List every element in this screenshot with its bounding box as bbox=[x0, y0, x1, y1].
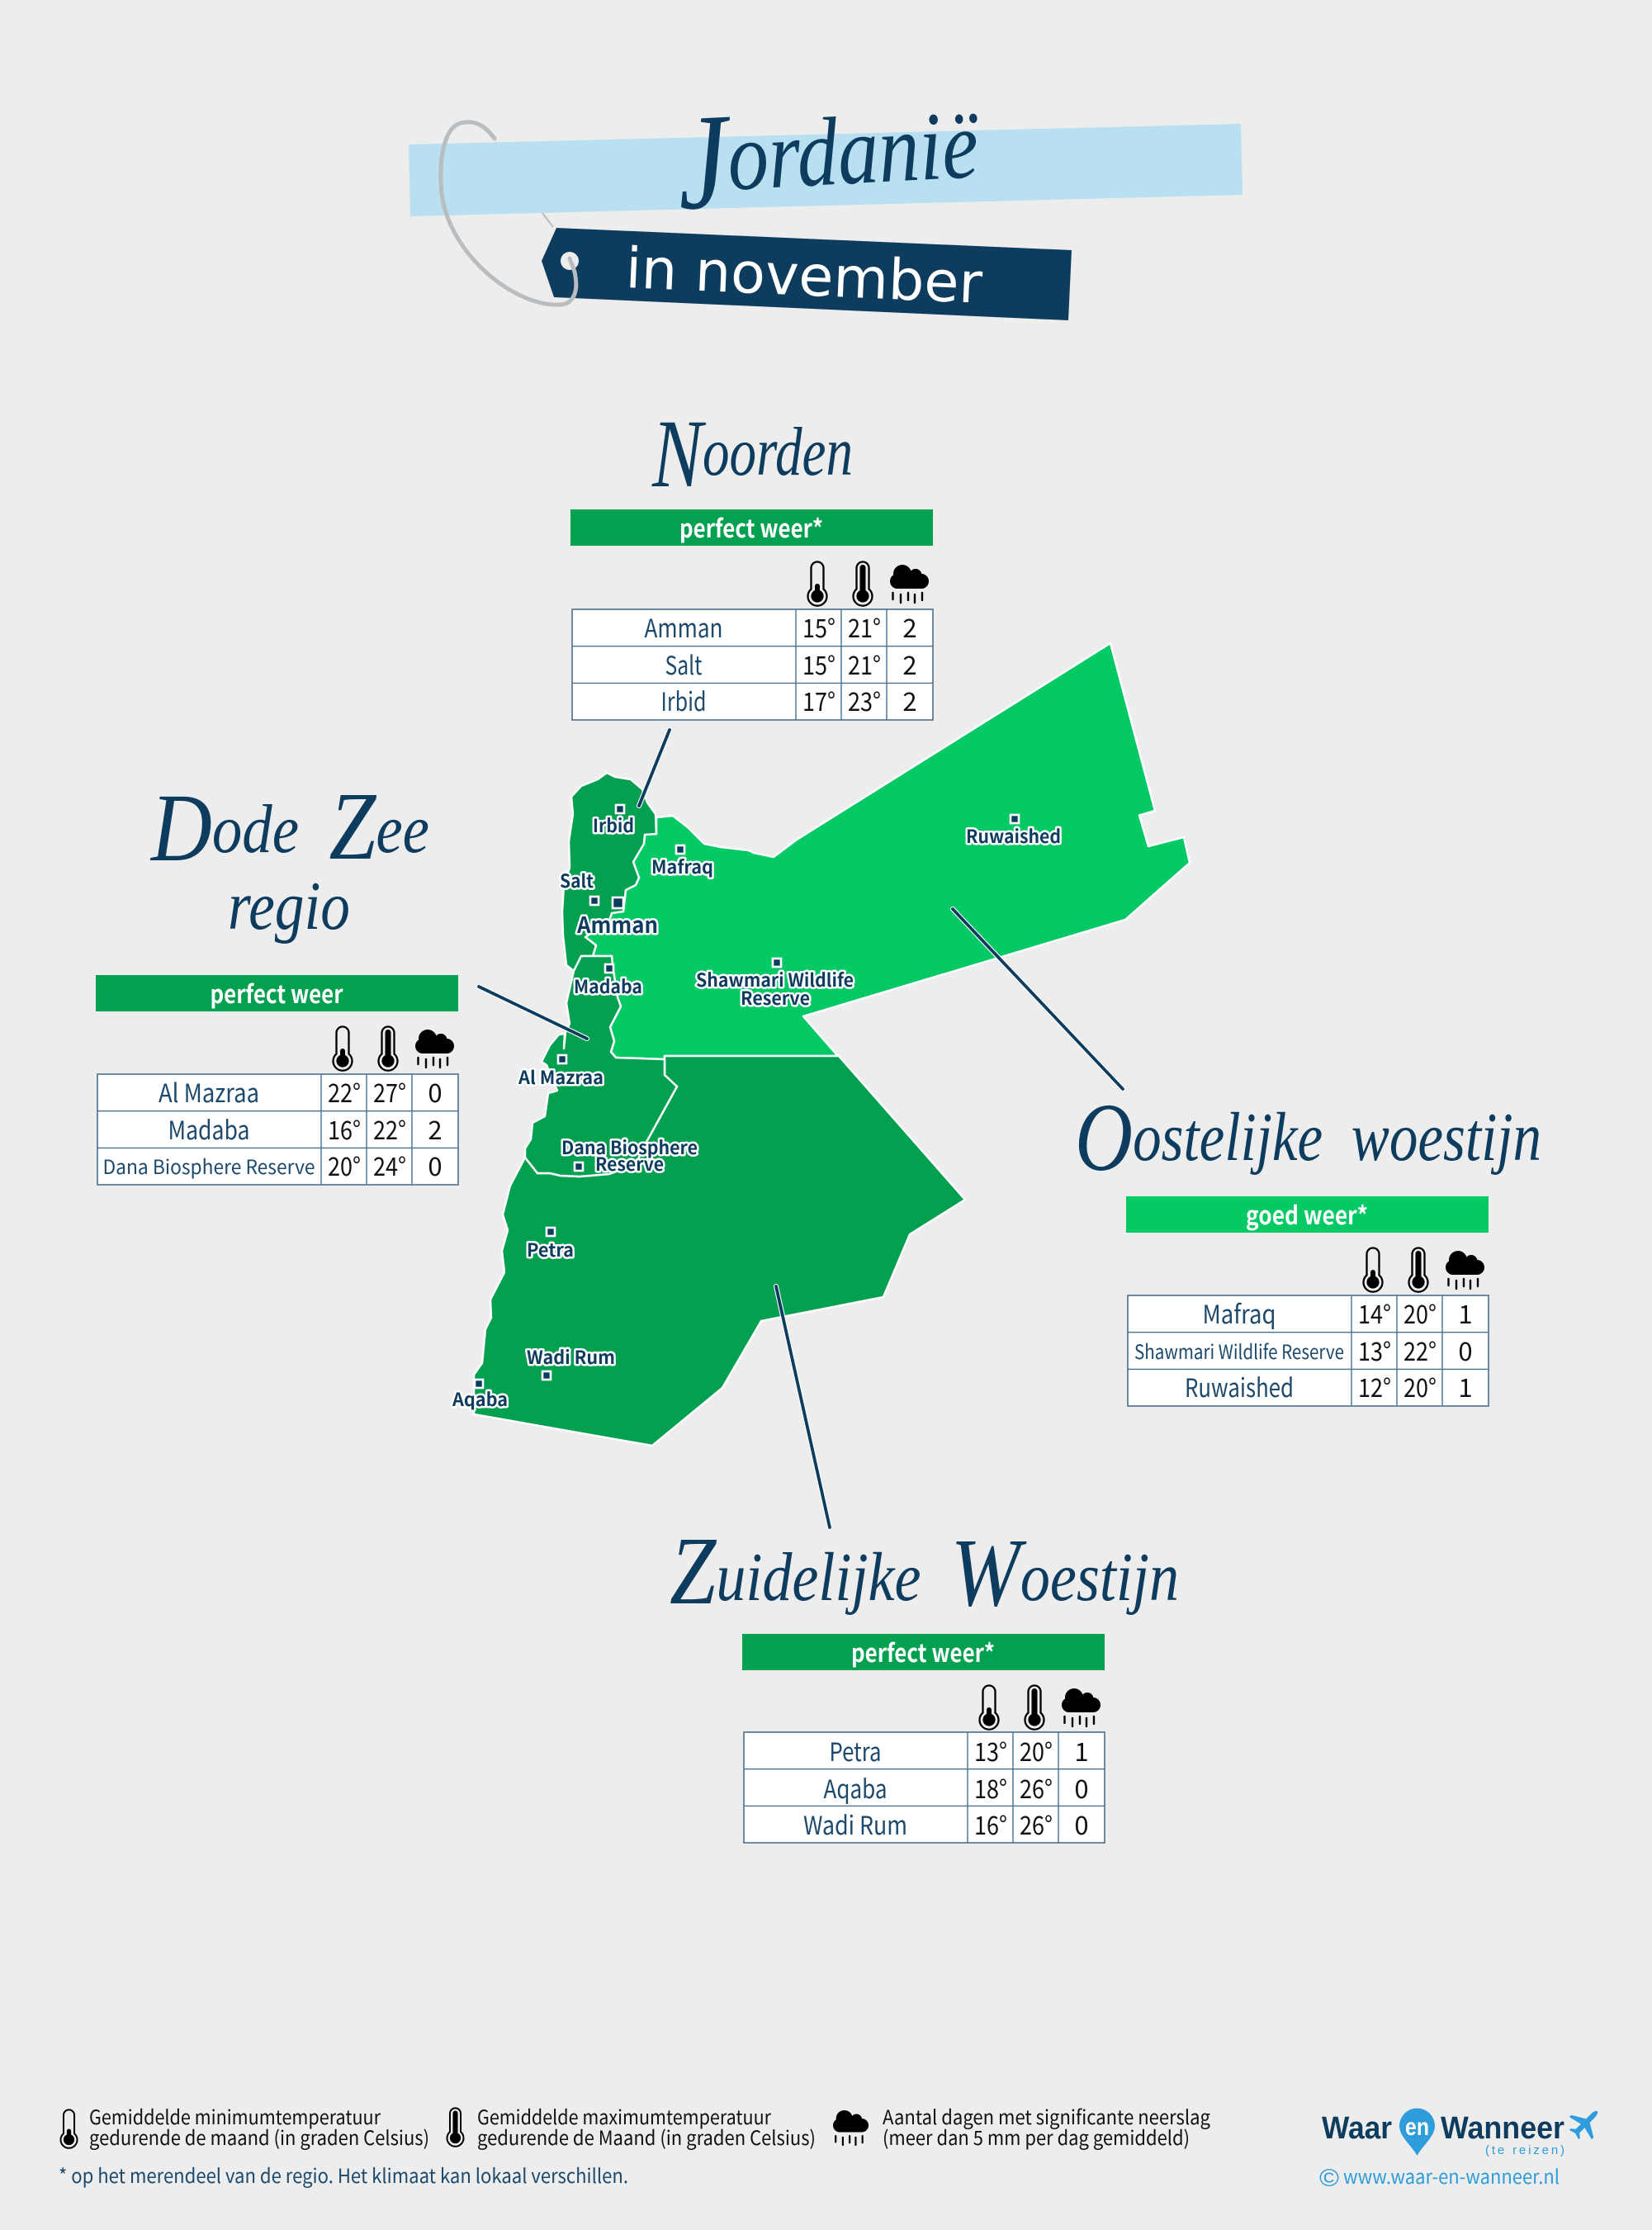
panel: Dode Zee regio bbox=[96, 974, 458, 1185]
title: Jordanië in november bbox=[409, 72, 1243, 320]
climate table: 22° bbox=[328, 1072, 361, 1110]
logo: Waar en Wanneer: (te reizen) bbox=[1485, 2143, 1564, 2157]
legend text: minimum temperature: Gemiddelde minimumtemperatuur bbox=[89, 2101, 381, 2130]
climate table: 2 bbox=[428, 1110, 443, 1147]
city labels bbox=[452, 812, 1061, 1412]
region: Zuidelijke Woestijn bbox=[474, 1056, 965, 1446]
city labels: Madaba bbox=[574, 973, 642, 999]
city labels: Dana Biosphere bbox=[561, 1134, 698, 1160]
status banner: perfect weer bbox=[210, 974, 343, 1011]
climate table: 27° bbox=[373, 1072, 406, 1110]
legend text: maximum temperature: Gemiddelde maximumtemperatuur bbox=[477, 2101, 772, 2130]
city labels: Ruwaished bbox=[966, 822, 1061, 849]
legend text: rain: (meer dan 5 mm per dag gemiddeld) bbox=[883, 2122, 1190, 2151]
logo: Waar en Wanneer bbox=[1322, 2100, 1608, 2157]
status banner: goed weer* bbox=[1246, 1195, 1368, 1232]
climate table bbox=[1128, 1294, 1489, 1406]
climate table: 2 bbox=[902, 608, 917, 645]
city labels: Shawmari Wildlife bbox=[696, 966, 854, 992]
climate table bbox=[97, 1072, 458, 1185]
climate table: 26° bbox=[1020, 1805, 1053, 1842]
climate table: 18° bbox=[974, 1768, 1007, 1806]
logo pin bbox=[1399, 2109, 1435, 2156]
climate table: 2 bbox=[902, 645, 917, 682]
icon: minimum temperature bbox=[1364, 1248, 1382, 1292]
city markers bbox=[475, 805, 1019, 1388]
climate table: Petra bbox=[829, 1731, 882, 1768]
climate table: 0 bbox=[1074, 1768, 1089, 1806]
climate table: 20° bbox=[1403, 1294, 1437, 1331]
climate table: 21° bbox=[848, 608, 881, 645]
city labels: Irbid bbox=[593, 812, 634, 838]
climate table: 1 bbox=[1458, 1367, 1473, 1404]
icon: legend rain bbox=[833, 2110, 869, 2145]
city labels: Mafraq bbox=[651, 853, 713, 879]
heading: Dode Zee regio: ee bbox=[376, 791, 429, 868]
price tag bbox=[542, 228, 1072, 320]
legend text: minimum temperature: gedurende de maand (in graden Celsius) bbox=[89, 2122, 429, 2151]
panel: Oostelijke woestijn bbox=[1126, 1195, 1489, 1406]
climate table: 2 bbox=[902, 681, 917, 718]
icon: maximum temperature bbox=[1408, 1248, 1428, 1292]
status banner: perfect weer* bbox=[851, 1633, 995, 1669]
website credit: www.waar-en-wanneer.nl bbox=[1343, 2161, 1560, 2190]
heading: Oostelijke woestijn: O bbox=[1075, 1083, 1133, 1191]
heading: Zuidelijke Woestijn: oestijn bbox=[1020, 1539, 1179, 1616]
climate table: 23° bbox=[848, 681, 881, 718]
icon: rain bbox=[890, 565, 929, 603]
region: Noorden bbox=[562, 773, 656, 971]
region: Dode Zee regio bbox=[525, 956, 677, 1177]
website credit: © bbox=[1319, 2165, 1339, 2192]
climate table: 13° bbox=[974, 1731, 1007, 1768]
climate table: Madaba bbox=[168, 1110, 249, 1147]
climate table: Salt bbox=[665, 645, 703, 682]
climate table: 1 bbox=[1074, 1731, 1089, 1768]
climate table: 26° bbox=[1020, 1768, 1053, 1806]
legend bbox=[60, 2101, 1210, 2151]
climate table: Amman bbox=[644, 608, 723, 645]
Jordanië: J bbox=[673, 85, 736, 239]
climate table: Irbid bbox=[660, 681, 707, 718]
climate table: 0 bbox=[428, 1072, 443, 1110]
climate table: Ruwaished bbox=[1185, 1367, 1294, 1404]
city labels: Amman bbox=[576, 907, 658, 940]
city labels: Al Mazraa bbox=[518, 1063, 604, 1090]
climate table: 1 bbox=[1458, 1294, 1473, 1331]
climate table: 20° bbox=[1403, 1367, 1437, 1404]
logo words: Waar bbox=[1322, 2111, 1392, 2146]
icon: maximum temperature bbox=[378, 1027, 398, 1071]
icon: rain bbox=[1062, 1688, 1101, 1726]
region: Oostelijke woestijn bbox=[585, 643, 1190, 1059]
city labels: Wadi Rum bbox=[527, 1343, 615, 1370]
climate table: Dana Biosphere Reserve bbox=[102, 1151, 315, 1180]
panel: Noorden bbox=[570, 509, 933, 720]
climate table: 22° bbox=[373, 1110, 406, 1147]
climate table: 20° bbox=[328, 1146, 361, 1183]
status banner bbox=[742, 1633, 1105, 1670]
heading: Dode Zee regio: regio bbox=[228, 868, 350, 945]
climate table: 20° bbox=[1020, 1731, 1053, 1768]
icon: legend maximum temperature bbox=[447, 2108, 464, 2147]
climate table: 16° bbox=[974, 1805, 1007, 1842]
legend text: minimum temperature bbox=[89, 2101, 429, 2151]
title band bbox=[409, 124, 1243, 216]
Jordanië: ordanië bbox=[725, 90, 982, 211]
city labels: Reserve bbox=[741, 984, 810, 1011]
climate table: 24° bbox=[373, 1146, 406, 1183]
icon: maximum temperature bbox=[854, 561, 872, 606]
heading: Dode Zee regio: D bbox=[149, 774, 212, 882]
climate table: 12° bbox=[1358, 1367, 1391, 1404]
legend text: maximum temperature bbox=[477, 2101, 816, 2151]
climate table: 0 bbox=[428, 1146, 443, 1183]
heading: Noorden: oorden bbox=[703, 414, 853, 490]
city labels: Aqaba bbox=[452, 1385, 508, 1412]
climate table: 13° bbox=[1358, 1331, 1391, 1368]
icon: rain bbox=[1446, 1251, 1484, 1289]
heading: Oostelijke woestijn: ostelijke woestijn bbox=[1133, 1099, 1541, 1176]
icon: minimum temperature bbox=[807, 561, 827, 606]
city labels: Reserve bbox=[595, 1150, 664, 1177]
climate table: 21° bbox=[848, 645, 881, 682]
heading: Dode Zee regio: ode bbox=[212, 791, 329, 868]
icon: rain bbox=[415, 1030, 454, 1068]
climate table: 22° bbox=[1403, 1331, 1437, 1368]
city labels: Salt bbox=[560, 867, 594, 893]
ring tail bbox=[542, 213, 553, 227]
climate table: 15° bbox=[802, 608, 835, 645]
in november: in november bbox=[624, 236, 983, 317]
heading: Dode Zee regio: Z bbox=[329, 772, 377, 880]
ring bbox=[441, 122, 576, 305]
climate table: 17° bbox=[802, 681, 835, 718]
climate table: 0 bbox=[1074, 1805, 1089, 1842]
icon: legend minimum temperature bbox=[60, 2109, 78, 2148]
climate table: Mafraq bbox=[1202, 1294, 1276, 1331]
legend text: rain: Aantal dagen met significante neerslag bbox=[883, 2101, 1210, 2130]
heading: Noorden: N bbox=[651, 400, 707, 508]
status banner: perfect weer* bbox=[679, 509, 823, 545]
footnote: * op het merendeel van de regio. Het klimaat kan lokaal verschillen. bbox=[59, 2160, 628, 2189]
climate table: 15° bbox=[802, 645, 835, 682]
climate table bbox=[744, 1731, 1105, 1843]
climate table: Al Mazraa bbox=[159, 1072, 259, 1110]
climate table bbox=[572, 608, 933, 720]
climate table: 14° bbox=[1358, 1294, 1391, 1331]
heading: Zuidelijke Woestijn: Z bbox=[670, 1517, 717, 1625]
heading: Zuidelijke Woestijn: uidelijke bbox=[716, 1539, 950, 1616]
icon: maximum temperature bbox=[1025, 1686, 1044, 1730]
status banner bbox=[1126, 1195, 1489, 1233]
icon: minimum temperature bbox=[334, 1027, 352, 1071]
climate table: Shawmari Wildlife Reserve bbox=[1134, 1336, 1344, 1365]
status banner bbox=[96, 974, 458, 1011]
heading: Dode Zee regio bbox=[149, 772, 429, 945]
map of Jordan bbox=[474, 643, 1190, 1446]
climate table: Aqaba bbox=[824, 1768, 887, 1806]
legend text: maximum temperature: gedurende de Maand (in graden Celsius) bbox=[477, 2122, 816, 2151]
icon: minimum temperature bbox=[979, 1686, 999, 1730]
climate table: Wadi Rum bbox=[803, 1805, 907, 1842]
status banner bbox=[570, 509, 933, 546]
climate table: 16° bbox=[328, 1110, 361, 1147]
icon: plane bbox=[1563, 2100, 1608, 2146]
logo: Waar en Wanneer: Wanneer bbox=[1441, 2111, 1564, 2146]
city labels: Petra bbox=[527, 1236, 574, 1262]
heading: Zuidelijke Woestijn: W bbox=[950, 1518, 1027, 1626]
logo: Waar en Wanneer: en bbox=[1405, 2114, 1429, 2141]
climate table: 0 bbox=[1458, 1331, 1473, 1368]
leader lines bbox=[479, 730, 1123, 1527]
legend text: rain bbox=[883, 2101, 1210, 2151]
panel: Zuidelijke Woestijn bbox=[742, 1633, 1105, 1843]
tag hole bbox=[561, 252, 579, 270]
